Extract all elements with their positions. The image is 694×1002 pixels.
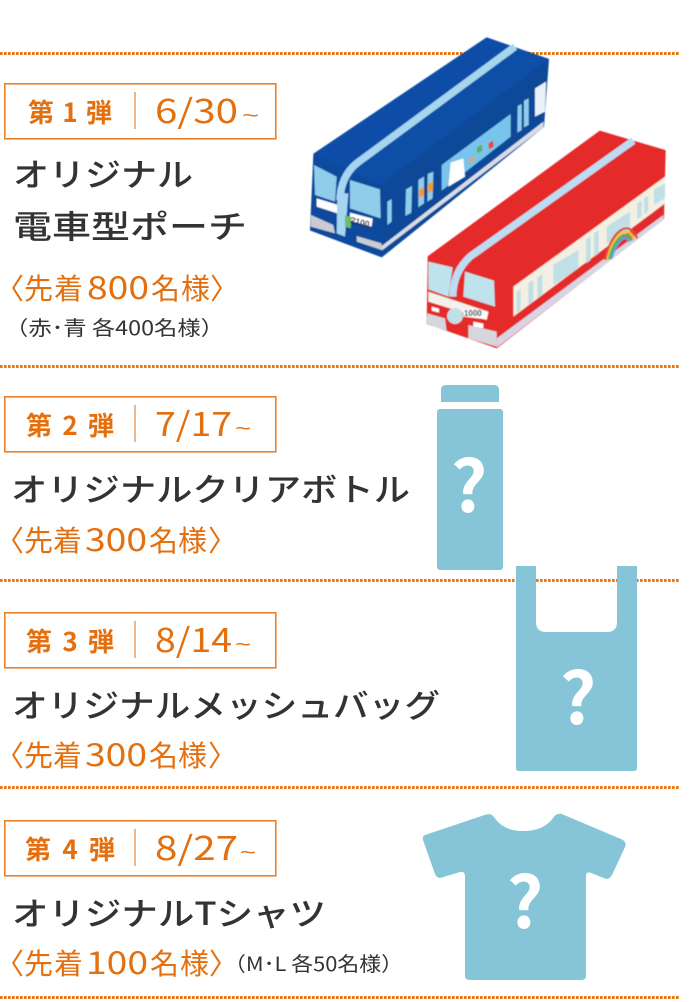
quantity: first 300: 〉 — [208, 518, 237, 560]
quantity: first 300 — [0, 515, 237, 560]
date badge 4: 第 4 弾 — [25, 830, 115, 867]
icon: mystery T-shirt — [423, 814, 626, 980]
quantity: first 800 — [0, 263, 239, 308]
quantity: first 300 — [0, 730, 237, 775]
quantity: first 100: 〉 — [209, 941, 238, 983]
date badge 3: 8/14 — [155, 614, 232, 662]
heading: original pouch: オリジナル — [13, 157, 193, 193]
date badge 2: 第 2 弾 — [26, 406, 114, 443]
date badge 2: ~ — [235, 418, 251, 440]
date badge 1 — [5, 84, 276, 139]
quantity: first 800: 〉 — [210, 266, 239, 308]
note: sizes: （M･L 各50名様） — [224, 948, 403, 977]
date badge 3: 第 3 弾 — [26, 622, 114, 659]
quantity: first 300: 名様 — [149, 733, 207, 775]
quantity: first 300: 300 — [85, 730, 147, 775]
date badge 2: 7/17 — [155, 398, 232, 446]
icon: mystery bottle — [437, 385, 503, 570]
quantity: first 800: 名様 — [151, 266, 210, 308]
date badge 4: 8/27 — [155, 822, 238, 870]
red pouch — [427, 131, 665, 348]
date badge 4: ~ — [240, 842, 256, 864]
quantity: first 100: 100 — [86, 938, 148, 983]
date badge 1: ~ — [242, 105, 259, 127]
quantity: first 300: 300 — [85, 515, 147, 560]
heading: mesh bag: オリジナルメッシュバッグ — [12, 688, 440, 724]
icon: mystery bottle: ? — [451, 431, 487, 533]
quantity: first 800: 800 — [87, 263, 149, 308]
heading: T-shirt: オリジナルTシャツ — [12, 889, 326, 935]
quantity: first 100: 名様 — [150, 941, 209, 983]
date badge 1: 6/30 — [155, 85, 238, 133]
blue pouch — [311, 38, 548, 257]
date badge 3: ~ — [235, 634, 251, 656]
section 3: mesh bag text — [0, 613, 440, 775]
quantity: first 300: 先着 — [24, 518, 82, 560]
quantity: first 800: 先着 — [24, 266, 83, 308]
photo: blue and red train pouches — [311, 38, 665, 348]
icon: mystery T-shirt: ? — [507, 847, 543, 949]
heading: original pouch: 電車型ポーチ — [13, 209, 247, 245]
date badge 3 — [5, 613, 276, 668]
date badge 2 — [5, 397, 276, 452]
note: colours: （赤･青 各400名様） — [5, 312, 224, 341]
date badge 1: 第 1 弾 — [28, 93, 112, 130]
section 4: T-shirt text — [0, 821, 403, 983]
heading: original pouch — [13, 157, 247, 245]
quantity: first 300: 〉 — [208, 733, 237, 775]
blue pouch: 2100 — [350, 215, 371, 229]
section 1: electric train pouch text — [0, 84, 276, 341]
quantity: first 100 — [0, 938, 238, 983]
quantity: first 100: 先着 — [24, 941, 83, 983]
section 2: clear bottle text — [0, 397, 410, 560]
red pouch: 1000 — [464, 309, 482, 318]
icon: mystery bag: ? — [560, 643, 596, 745]
date badge 4 — [5, 821, 276, 876]
heading: clear bottle: オリジナルクリアボトル — [11, 472, 410, 508]
quantity: first 300: 名様 — [149, 518, 207, 560]
icon: mystery bag — [516, 566, 637, 771]
quantity: first 300: 先着 — [24, 733, 82, 775]
